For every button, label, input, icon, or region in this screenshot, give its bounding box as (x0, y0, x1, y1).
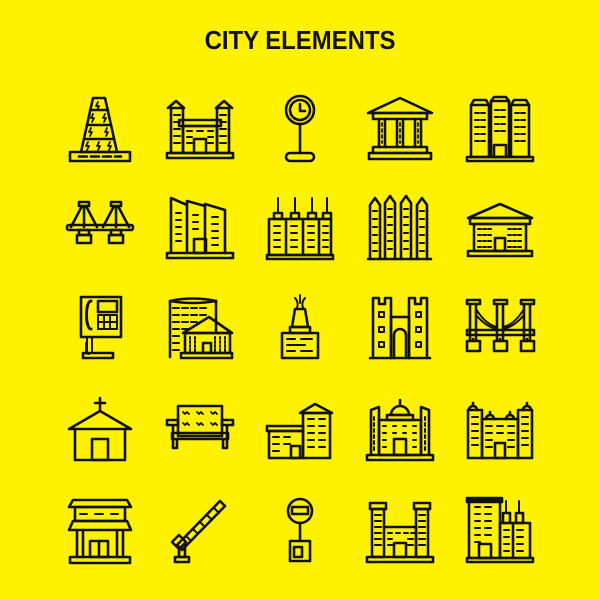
icon: cylinder building with pavilion (170, 298, 232, 358)
icon: bank temple (368, 98, 432, 159)
icon: three towers (467, 97, 533, 161)
icon: suspension bridge (67, 202, 133, 243)
icon: church house (69, 398, 131, 460)
icon: pagoda station (69, 500, 131, 563)
icon: bench billboard (167, 406, 233, 448)
icon: barrier gate (172, 501, 225, 562)
icon: slanted skyscrapers (167, 198, 233, 258)
icon: palace (468, 403, 532, 458)
icon: pay phone (81, 297, 121, 358)
icon: twin tower building (167, 101, 233, 158)
icon: cone tower (70, 98, 130, 161)
icon: pavilion (468, 204, 532, 256)
icon: castle gate (370, 298, 430, 358)
icon: bus stop sign (288, 499, 312, 561)
icon: office with chimneys (467, 498, 533, 562)
icon: four towers (368, 196, 431, 259)
icon: monument (282, 295, 318, 358)
icon: gate building (367, 503, 433, 562)
icon: street clock (286, 96, 314, 161)
icon: pillar bridge (467, 300, 534, 351)
icon: antenna towers (267, 198, 333, 259)
title: CITY ELEMENTS (205, 26, 395, 55)
icon: low building with tower (267, 404, 332, 458)
icon: dome building (367, 400, 433, 460)
